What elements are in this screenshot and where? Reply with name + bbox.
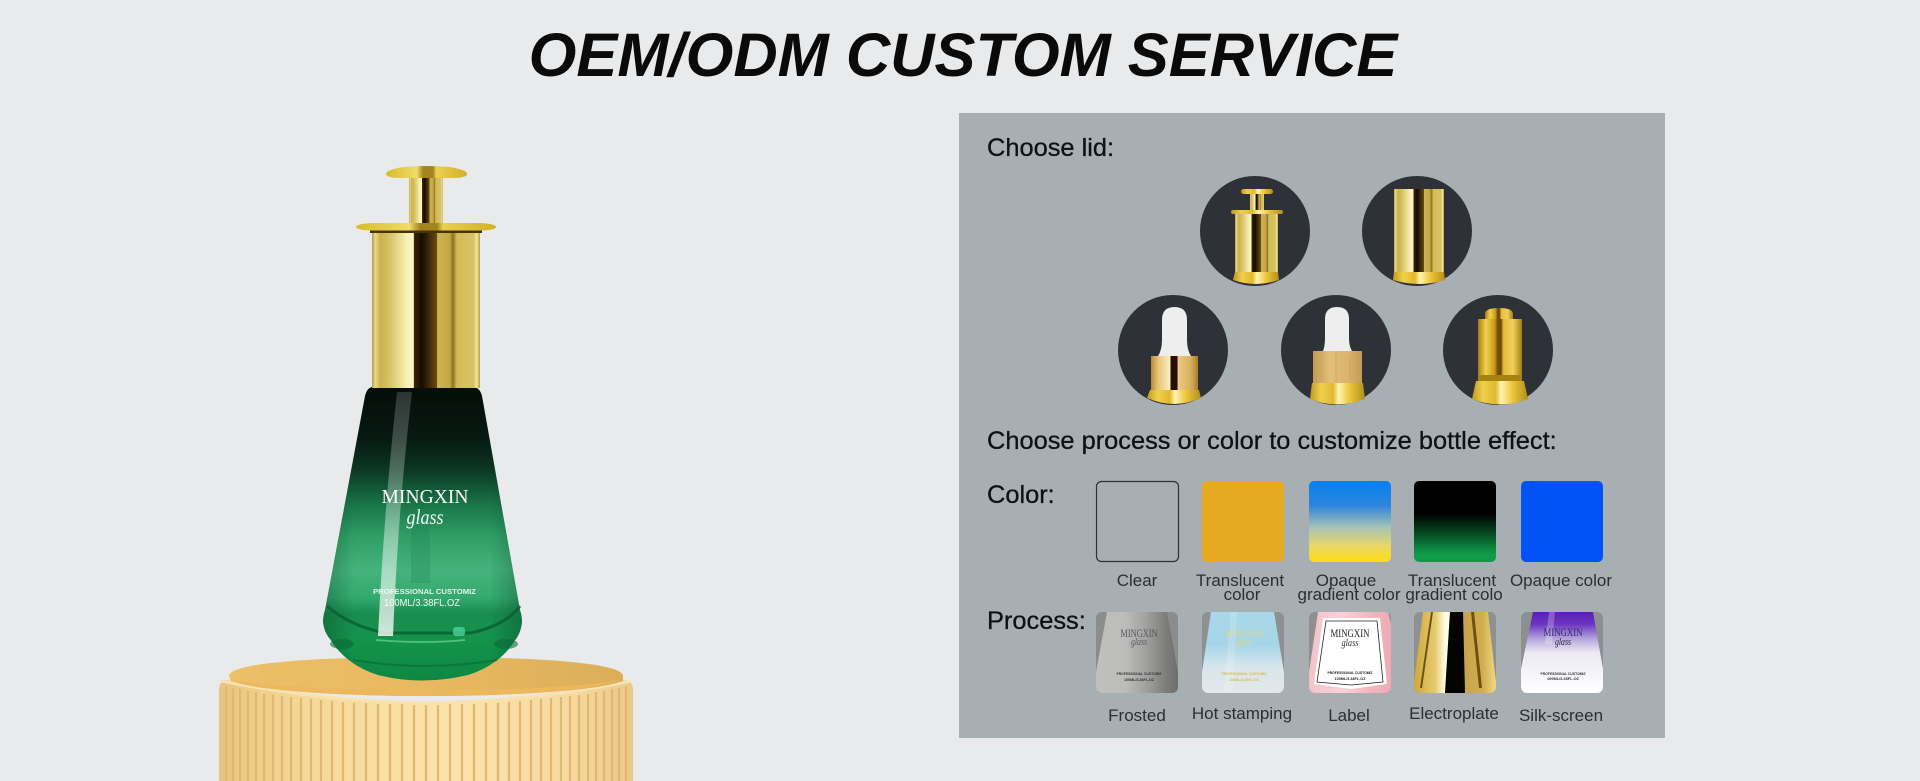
- process thumbnail: silk-screen: 100ML/3.38FL.OZ: [1547, 677, 1580, 681]
- lid option: white dropper gold collar: [1118, 295, 1228, 405]
- heading: color: Color:: [987, 481, 1055, 509]
- process thumbnail: silk-screen: [1519, 612, 1603, 725]
- bottle branding: glass: [406, 505, 444, 529]
- bottle branding: [373, 487, 477, 609]
- bottle branding: 100ML/3.38FL.OZ: [384, 597, 461, 609]
- glass highlight: [378, 392, 412, 636]
- process thumbnail: hot stamping: [1192, 612, 1292, 723]
- color swatch: opaque gradient color: [1297, 481, 1401, 604]
- process thumbnail: label: Label: [1328, 706, 1370, 725]
- color swatch: translucent gradient color: gradient colo: [1405, 585, 1503, 604]
- process thumbnail: frosted: [1096, 612, 1178, 725]
- process thumbnail: silk-screen: PROFESSIONAL CUSTOMIZ: [1540, 672, 1586, 676]
- process thumbnail: label: PROFESSIONAL CUSTOMIZ: [1328, 671, 1373, 675]
- color swatch: translucent color: [1196, 481, 1284, 604]
- inner base rim: [327, 606, 520, 633]
- color swatch: translucent gradient color: Translucent: [1408, 571, 1496, 590]
- color swatch: opaque color: [1510, 481, 1612, 590]
- heading: process: Process:: [987, 607, 1086, 635]
- process thumbnail: silk-screen: glass: [1555, 637, 1571, 648]
- lid option: straight cap: [1362, 176, 1472, 286]
- lid option: gold press cap: [1443, 295, 1553, 405]
- process thumbnail: hot stamping: Hot stamping: [1192, 704, 1292, 723]
- bottle branding: MINGXIN: [382, 487, 468, 508]
- process thumbnail: label: glass: [1342, 638, 1359, 649]
- process thumbnail: frosted: PROFESSIONAL CUSTOMIZ: [1116, 672, 1162, 676]
- process thumbnail: frosted: glass: [1131, 637, 1147, 648]
- process thumbnail: electroplate: Electroplate: [1409, 704, 1499, 723]
- lid option: syringe cap: [1200, 176, 1310, 286]
- color swatch: clear: [1096, 482, 1178, 590]
- bottle branding: PROFESSIONAL CUSTOMIZ: [373, 587, 477, 596]
- pedestal: [219, 657, 633, 781]
- color swatch: clear: Clear: [1117, 571, 1158, 590]
- process thumbnail: hot stamping: MINGXIN: [1225, 628, 1264, 640]
- dropper tube: [411, 525, 430, 583]
- color swatch: translucent gradient color: [1405, 481, 1503, 604]
- process thumbnail: hot stamping: 100ML/3.38FL.OZ: [1229, 678, 1260, 682]
- color swatch: translucent color: Translucent: [1196, 571, 1284, 590]
- heading: choose process or color: Choose process or color to customize bottle effect:: [987, 427, 1557, 455]
- title: OEM/ODM CUSTOM SERVICE: [529, 21, 1399, 90]
- panel: customization options: [959, 113, 1665, 738]
- color swatch: opaque gradient color: gradient color: [1297, 585, 1401, 604]
- color swatch: opaque color: Opaque color: [1510, 571, 1612, 590]
- color swatch: translucent color: color: [1224, 585, 1261, 604]
- color swatch: opaque gradient color: Opaque: [1316, 571, 1376, 590]
- bottle glass: [323, 387, 522, 680]
- process thumbnail: silk-screen: Silk-screen: [1519, 706, 1603, 725]
- gold cap: [356, 166, 496, 388]
- process thumbnail: frosted: MINGXIN: [1120, 628, 1158, 640]
- process thumbnail: label: MINGXIN: [1330, 628, 1370, 640]
- heading: choose lid: Choose lid:: [987, 134, 1114, 162]
- process thumbnail: hot stamping: PROFESSIONAL CUSTOMIZ: [1222, 672, 1267, 676]
- process thumbnail: label: 100ML/3.38FL.OZ: [1334, 677, 1366, 681]
- process thumbnail: frosted: 100ML/3.38FL.OZ: [1124, 678, 1155, 682]
- product: bottle on pedestal: [219, 166, 633, 781]
- process thumbnail: label: [1309, 612, 1391, 725]
- process thumbnail: hot stamping: glass: [1236, 637, 1252, 648]
- process thumbnail: frosted: Frosted: [1108, 706, 1166, 725]
- process thumbnail: electroplate: [1409, 612, 1499, 723]
- process thumbnail: silk-screen: MINGXIN: [1544, 627, 1583, 639]
- lid option: white dropper bamboo collar: [1281, 295, 1391, 405]
